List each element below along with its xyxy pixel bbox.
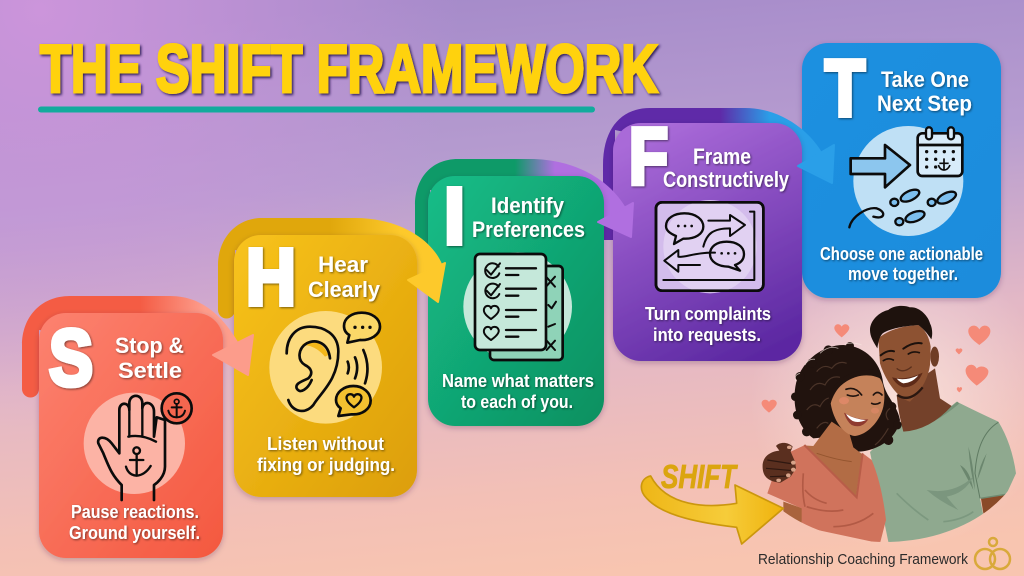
connector band: H to I [218,218,442,318]
icon: hand with anchor [84,393,192,500]
text: Listen without fixing or judging: fixing or judging. [257,455,395,475]
text: Choose one actionable move together: move together. [848,264,958,284]
letter T: T [825,44,865,132]
card: T [802,43,1001,298]
panel: H Hear Clearly [218,218,445,497]
card: H [234,235,417,497]
card: F [613,123,802,361]
woman's hair [795,345,900,452]
caption: Relationship Coaching Framework [758,552,969,568]
heading: Stop & Settle: Stop & [115,333,184,358]
connector band: I to F [415,159,626,262]
text: Name what matters to each of you [442,371,594,412]
SHIFT curved arrow [641,476,783,544]
heading: Hear Clearly: Clearly [308,277,381,302]
woman's hairline [828,370,883,403]
SHIFT label: SHIFT [661,458,738,495]
illustration: smiling couple [763,306,1016,550]
icon: interlocking rings [975,538,1010,569]
icon: checklist pages [463,252,572,361]
panel: F Frame Constructively [603,108,834,361]
text: Choose one actionable move together: Choose one actionable [820,244,983,264]
heading: Stop & Settle: Settle [118,358,182,383]
heading: Identify Preferences [472,193,585,242]
arrow: H to I [408,263,445,302]
card: I [428,176,604,426]
heading: Stop & Settle [115,333,184,383]
heading: Frame Constructively: Frame [693,144,751,169]
letter I: I [444,172,465,260]
panel: T Take One Next Step [802,43,1001,298]
panel: S Stop & Settle [22,296,253,558]
arrow: F to T [798,145,834,183]
text: Name what matters to each of you: Name what matters [442,371,594,391]
woman's arm [783,502,803,525]
text: Name what matters to each of you: to each of you. [461,392,573,412]
icon: speech bubbles with arrows [656,200,763,293]
woman's neck and chest [803,422,862,497]
woman's features [846,388,882,395]
text: Turn complaints into requests [645,304,771,345]
text: Pause reactions. Ground yourself. [69,502,200,543]
text: Listen without fixing or judging [257,434,395,475]
heading: Take One Next Step [877,67,972,116]
letter H: H [246,232,296,322]
text: Choose one actionable move together [820,244,983,284]
text: Turn complaints into requests: into requests. [653,325,761,345]
title: THE SHIFT FRAMEWORK [40,31,658,107]
heading: Frame Constructively: Constructively [663,167,790,192]
woman's shirt [767,445,886,543]
text: Pause reactions. Ground yourself.: Pause reactions. [71,502,199,522]
heading: Identify Preferences: Identify [491,193,565,218]
title underline [38,106,595,112]
man's hand [763,443,796,483]
text: Listen without fixing or judging: Listen without [267,434,384,454]
panel: I Identify Preferences [415,159,633,426]
arrow: S to H [213,335,253,375]
icon: ear with speech bubbles [269,311,382,424]
letter S: S [49,313,93,402]
heading: Hear Clearly: Hear [318,252,368,277]
connector band: S to H [22,296,240,398]
hearts [762,324,990,413]
heading: Take One Next Step: Next Step [877,91,972,116]
icon: arrow, calendar and footsteps [849,126,963,236]
woman [763,342,902,543]
man's shirt and arm [870,402,1016,550]
heading: Identify Preferences: Preferences [472,217,585,242]
connector band: F to T [603,108,824,240]
letter F: F [629,112,668,200]
text: Pause reactions. Ground yourself.: Ground yourself. [69,523,200,543]
text: Turn complaints into requests: Turn complaints [645,304,771,324]
heading: Frame Constructively [663,144,790,192]
card: S [39,313,223,558]
woman's face [831,373,884,436]
arrow: I to F [598,203,633,237]
man's head [870,306,952,432]
heading: Hear Clearly [308,252,381,302]
heading: Take One Next Step: Take One [881,67,969,92]
